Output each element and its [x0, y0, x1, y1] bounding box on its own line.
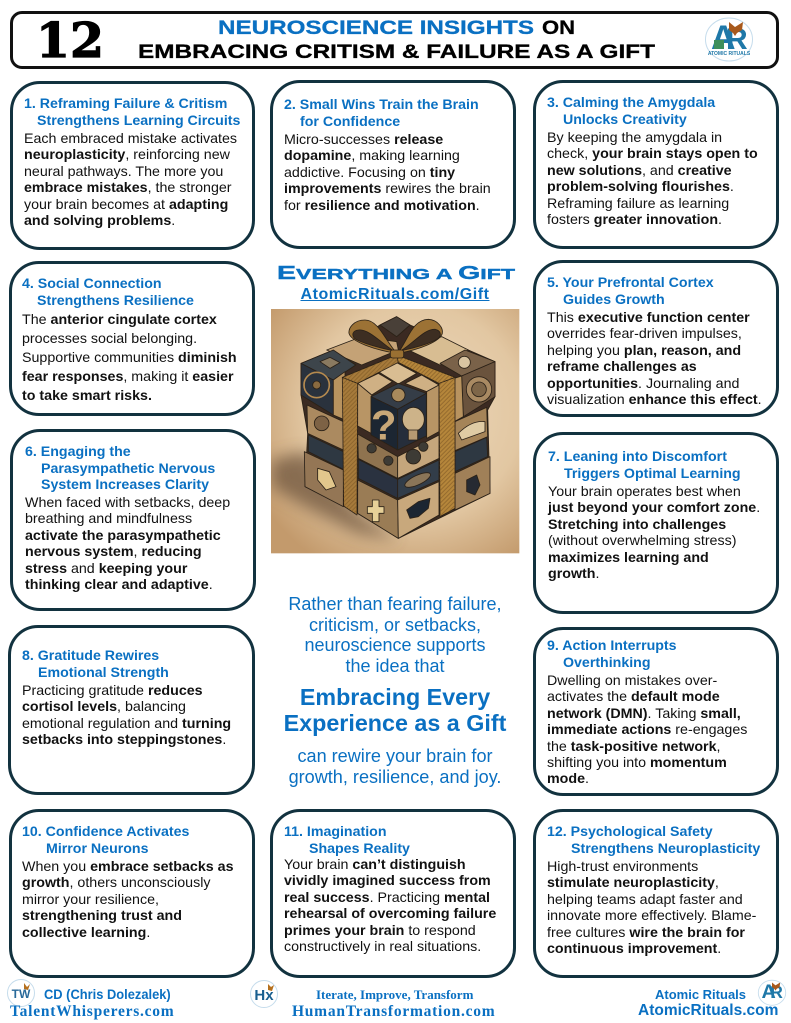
- center heading: Everything a Gift: E VERYTHING A G IFT: [277, 262, 515, 283]
- body 4: The anterior cingulate cortex: [22, 312, 217, 328]
- body 5: helping you plan, reason, and: [547, 343, 741, 359]
- heading 3: [547, 95, 716, 128]
- body 7: [548, 484, 760, 582]
- body 6: stress and keeping your: [25, 561, 187, 577]
- icon: Human Transformation logo: Hx: [254, 987, 274, 1004]
- heading 5: [547, 275, 714, 308]
- icon: Atomic Rituals logo: ATOMIC RITUALS: [708, 51, 751, 57]
- body 8: setbacks into steppingstones.: [22, 732, 226, 748]
- heading 9: 9. Action Interrupts: [547, 638, 677, 654]
- heading 9: Overthinking: [563, 654, 651, 670]
- heading 2: for Confidence: [300, 114, 400, 130]
- question mark glyph: ?: [371, 401, 396, 448]
- body 2: for resilience and motivation.: [284, 198, 480, 214]
- icon: Atomic Rituals logo: [705, 18, 753, 62]
- gear layer: [358, 434, 398, 478]
- body 12: helping teams adapt faster and: [547, 892, 743, 908]
- body 2: addictive. Focusing on tiny: [284, 165, 455, 181]
- center statement: Rather than fearing failure,: [288, 594, 502, 614]
- body 11: Your brain can’t distinguish: [284, 857, 466, 873]
- heading 10: 10. Confidence Activates: [22, 824, 189, 840]
- title: ON: [542, 17, 575, 39]
- body 9: network (DMN). Taking small,: [547, 706, 741, 722]
- body 5: overrides fear-driven impulses,: [547, 326, 742, 342]
- body 10: strengthening trust and: [22, 908, 182, 924]
- body 5: This executive function center: [547, 310, 750, 326]
- shadow: [271, 452, 398, 540]
- panel: insight 5: [533, 260, 779, 417]
- heading 9: [547, 638, 677, 670]
- body 10: mirror your resilience,: [22, 892, 159, 908]
- number 12: 12: [36, 13, 104, 69]
- body 1: your brain becomes at adapting: [24, 197, 228, 213]
- body 6: nervous system, reducing: [25, 544, 202, 560]
- title: EMBRACING CRITISM & FAILURE AS A GIFT: [138, 41, 655, 63]
- text: AtomicRituals.com: [638, 1002, 778, 1019]
- body 4: to take smart risks.: [22, 388, 152, 404]
- icon: Atomic Rituals small logo: [758, 980, 786, 1006]
- body 12: free cultures wire the brain for: [547, 925, 745, 941]
- body 1: Each embraced mistake activates: [24, 131, 237, 147]
- panel: insight 7: [533, 432, 779, 614]
- panel: insight 10: [9, 809, 255, 978]
- body 11: constructively in real situations.: [284, 939, 481, 955]
- footer: right: Atomic Rituals: [655, 987, 746, 1002]
- footer: center: Iterate, Improve, Transform: [316, 987, 473, 1002]
- body 1: neuroplasticity, reinforcing new: [24, 147, 230, 163]
- heading 6: [25, 444, 215, 493]
- center conclusion: growth, resilience, and joy.: [289, 767, 501, 787]
- ribbons: [342, 377, 358, 515]
- heading 4: Strengthens Resilience: [37, 292, 194, 308]
- heading 12: 12. Psychological Safety: [547, 824, 713, 840]
- body 6: When faced with setbacks, deep: [25, 495, 230, 511]
- body 4: processes social belonging.: [22, 331, 197, 347]
- heading 11: Shapes Reality: [309, 840, 410, 856]
- bottom layer: [358, 480, 398, 538]
- body 6: thinking clear and adaptive.: [25, 577, 213, 593]
- body 5: opportunities. Journaling and: [547, 376, 739, 392]
- body 11: [284, 857, 496, 955]
- panel: insight 1: [10, 81, 255, 250]
- body 3: fosters greater innovation.: [547, 212, 722, 228]
- heading 2: 2. Small Wins Train the Brain: [284, 97, 479, 113]
- heading 4: 4. Social Connection: [22, 276, 162, 292]
- body 8: [22, 683, 231, 748]
- body 6: activate the parasympathetic: [25, 528, 221, 544]
- heading 6: System Increases Clarity: [41, 477, 209, 493]
- body 1: [24, 131, 237, 229]
- panel: insight 2: [270, 80, 516, 249]
- left mid layers: [307, 405, 343, 450]
- body 9: the task-positive network,: [547, 739, 720, 755]
- body 5: [547, 310, 762, 408]
- body 7: Stretching into challenges: [548, 517, 726, 533]
- body 6: [25, 495, 230, 593]
- body 12: continuous improvement.: [547, 941, 721, 957]
- body 7: Your brain operates best when: [548, 484, 741, 500]
- body 2: improvements rewires the brain: [284, 181, 491, 197]
- body 9: immediate actions re-engages: [547, 722, 747, 738]
- body 2: Micro-successes release: [284, 132, 443, 148]
- body 10: When you embrace setbacks as: [22, 859, 234, 875]
- body 4: fear responses, making it easier: [22, 369, 234, 385]
- center emphasis: Experience as a Gift: [284, 710, 506, 736]
- body 5: reframe challenges as: [547, 359, 697, 375]
- heading 11: [284, 824, 410, 856]
- centre top faces: [378, 363, 417, 384]
- bow: [349, 320, 397, 353]
- heading 5: 5. Your Prefrontal Cortex: [547, 275, 714, 291]
- heading 1: 1. Reframing Failure & Critism: [24, 96, 227, 112]
- body 11: primes your brain to respond: [284, 923, 476, 939]
- body 10: collective learning.: [22, 925, 150, 941]
- header banner: [10, 11, 779, 69]
- body 3: [547, 130, 758, 228]
- body 2: dopamine, making learning: [284, 148, 460, 164]
- body 2: [284, 132, 491, 214]
- body 7: growth.: [548, 566, 599, 582]
- body 12: [547, 859, 756, 957]
- body 12: innovate more effectively. Blame-: [547, 908, 756, 924]
- body 3: new solutions, and creative: [547, 163, 732, 179]
- center emphasis: [284, 684, 506, 736]
- heading 12: [547, 824, 760, 856]
- center emphasis: Embracing Every: [300, 684, 490, 710]
- panel: insight 12: [533, 809, 779, 978]
- back top: [380, 317, 410, 337]
- body 11: real success. Practicing mental: [284, 890, 490, 906]
- body 3: Reframing failure as learning: [547, 196, 729, 212]
- body 9: activates the default mode: [547, 689, 720, 705]
- body 6: breathing and mindfulness: [25, 511, 192, 527]
- body 8: cortisol levels, balancing: [22, 699, 186, 715]
- heading 8: [22, 648, 169, 680]
- text: TalentWhisperers.com: [10, 1003, 174, 1020]
- body 4: [22, 312, 237, 404]
- heading 10: [22, 824, 189, 856]
- body 8: Practicing gratitude reduces: [22, 683, 203, 699]
- body 3: problem-solving flourishes.: [547, 179, 734, 195]
- light bulb glyph: [402, 407, 424, 431]
- heading 6: Parasympathetic Nervous: [41, 460, 215, 476]
- heading 3: Unlocks Creativity: [563, 112, 687, 128]
- panel: insight 9: [533, 627, 779, 796]
- icon: Atomic Rituals small logo: A: [762, 981, 776, 1003]
- panel: insight 4: [9, 261, 255, 416]
- right mid layers: [455, 407, 488, 451]
- heading 2: [284, 97, 479, 130]
- title: [138, 17, 655, 63]
- heading 10: Mirror Neurons: [46, 840, 148, 856]
- panel: insight 11: [270, 809, 516, 978]
- center conclusion: [289, 746, 501, 787]
- icon: Atomic Rituals logo: A: [711, 19, 736, 57]
- icon: Talent Whisperers logo: TW: [12, 987, 31, 1001]
- center statement: neuroscience supports: [304, 635, 486, 655]
- dark layer: [358, 459, 398, 498]
- body 12: High-trust environments: [547, 859, 698, 875]
- heading 11: 11. Imagination: [284, 824, 386, 840]
- body 9: mode.: [547, 771, 589, 787]
- centre dark cube: [371, 383, 426, 409]
- heading 7: [548, 449, 741, 482]
- footer: left: CD (Chris Dolezalek): [44, 986, 171, 1002]
- heading 7: 7. Leaning into Discomfort: [548, 449, 727, 465]
- heading 5: Guides Growth: [563, 292, 665, 308]
- text: HumanTransformation.com: [292, 1003, 495, 1020]
- body 9: Dwelling on mistakes over-: [547, 673, 717, 689]
- body 10: growth, others unconsciously: [22, 875, 210, 891]
- underlay silhouette: [301, 317, 495, 538]
- icon: Human Transformation logo: [250, 980, 278, 1008]
- icon: Atomic Rituals small logo: R: [770, 982, 783, 1002]
- heading 1: Strengthens Learning Circuits: [37, 112, 240, 128]
- body 7: maximizes learning and: [548, 550, 709, 566]
- body 1: and solving problems.: [24, 213, 175, 229]
- body 7: (without overwhelming stress): [548, 533, 736, 549]
- body 10: [22, 859, 234, 941]
- title: NEUROSCIENCE INSIGHTS: [218, 17, 534, 39]
- body 7: just beyond your comfort zone.: [548, 500, 760, 516]
- center statement: [288, 594, 502, 676]
- heading 3: 3. Calming the Amygdala: [547, 95, 715, 111]
- heading 12: Strengthens Neuroplasticity: [571, 840, 760, 856]
- illustration: gift box made of puzzle blocks: [271, 309, 520, 554]
- upper left dark block: [301, 350, 356, 380]
- body 9: [547, 673, 747, 787]
- heading 4: [22, 276, 194, 308]
- heading 1: [24, 96, 240, 128]
- upper right block: [440, 350, 495, 376]
- heading 6: 6. Engaging the: [25, 444, 131, 460]
- icon: Talent Whisperers logo: [7, 979, 35, 1007]
- panel: insight 6: [10, 429, 256, 611]
- body 11: vividly imagined success from: [284, 873, 491, 889]
- body 12: stimulate neuroplasticity,: [547, 875, 719, 891]
- center conclusion: can rewire your brain for: [297, 746, 493, 766]
- heading 8: 8. Gratitude Rewires: [22, 648, 159, 664]
- panel: insight 3: [533, 80, 779, 249]
- icon: Atomic Rituals logo: R: [726, 23, 748, 56]
- body 3: By keeping the amygdala in: [547, 130, 722, 146]
- heading 8: Emotional Strength: [38, 664, 169, 680]
- body 9: shifting you into momentum: [547, 755, 727, 771]
- link: AtomicRituals.com/Gift: AtomicRituals.com/Gift: [300, 286, 490, 303]
- body 1: embrace mistakes, the stronger: [24, 180, 232, 196]
- body 1: neural pathways. The more you: [24, 164, 223, 180]
- center statement: criticism, or setbacks,: [309, 615, 481, 635]
- heading 7: Triggers Optimal Learning: [564, 466, 741, 482]
- center statement: the idea that: [345, 656, 445, 676]
- panel: insight 8: [8, 625, 255, 795]
- body 11: rehearsal of overcoming failure: [284, 906, 496, 922]
- body 5: visualization enhance this effect.: [547, 392, 762, 408]
- body 3: check, your brain stays open to: [547, 146, 758, 162]
- body 4: Supportive communities diminish: [22, 350, 237, 366]
- body 8: emotional regulation and turning: [22, 716, 231, 732]
